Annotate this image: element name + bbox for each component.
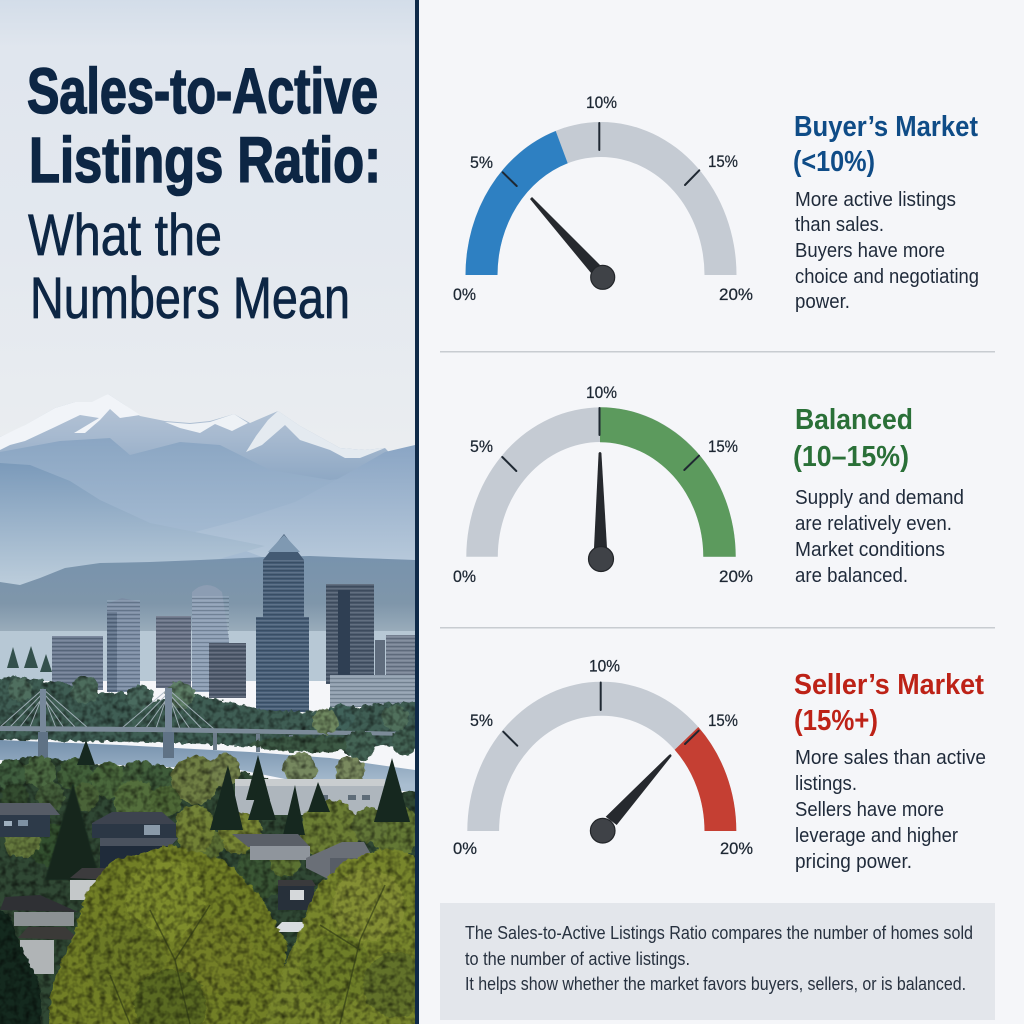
skyline towers <box>52 534 415 712</box>
gauge: balanced: 5% <box>470 437 493 456</box>
gauge: balanced: 10% <box>586 383 617 402</box>
cable-stayed bridge <box>0 688 415 758</box>
text: balanced: Supply and demand <box>795 487 964 509</box>
gauge: buyer's market: 15% <box>708 152 738 171</box>
callout: definition note: The Sales-to-Active Listings Ratio compares the number of homes sold <box>465 923 973 943</box>
gauge: seller's market: 5% <box>470 711 493 730</box>
text: buyer's market: (<10%) <box>793 146 875 178</box>
text: buyer's market: than sales. <box>795 214 884 236</box>
distant tree line <box>0 676 425 748</box>
mid olive trees <box>4 800 421 860</box>
conifers <box>45 740 410 880</box>
houses <box>0 803 372 974</box>
separator <box>440 627 995 628</box>
gauge: buyer's market: 0% <box>453 285 476 304</box>
gauge: seller's market <box>453 657 753 858</box>
left mountain <box>0 463 265 585</box>
foreground olive trees <box>48 845 427 1024</box>
text: buyer's market: power. <box>795 291 850 313</box>
text: seller's market: (15%+) <box>794 705 878 737</box>
separator <box>440 351 995 352</box>
title: What the <box>28 203 222 268</box>
text: seller's market: Sellers have more <box>795 799 944 821</box>
text: balanced: Balanced <box>795 404 913 436</box>
sky <box>0 0 415 480</box>
text: seller's market <box>794 669 986 873</box>
title: Numbers Mean <box>30 266 350 331</box>
text: seller's market: Seller’s Market <box>794 669 984 701</box>
text: buyer's market <box>793 111 979 313</box>
gauge: balanced: 20% <box>719 567 753 586</box>
title: Sales-to-Active <box>27 55 378 127</box>
text: balanced <box>793 404 964 587</box>
gauge: buyer's market <box>453 93 753 304</box>
text: buyer's market: choice and negotiating <box>795 266 979 288</box>
text: seller's market: More sales than active <box>795 747 986 769</box>
foreground dark tree <box>0 905 42 1024</box>
gauge: balanced: 0% <box>453 567 476 586</box>
tree branches <box>110 885 385 1024</box>
divider bar <box>415 0 419 1024</box>
text: balanced: (10–15%) <box>793 441 909 473</box>
title <box>27 55 381 331</box>
text: balanced: are balanced. <box>795 565 908 587</box>
gauge: balanced: 15% <box>708 437 738 456</box>
text: balanced: are relatively even. <box>795 513 952 535</box>
distant conifers <box>7 646 52 672</box>
callout: definition note: to the number of active listings. <box>465 949 690 969</box>
snow-capped mountain range <box>0 394 415 560</box>
text: seller's market: pricing power. <box>795 851 912 873</box>
gauge: buyer's market: 20% <box>719 285 753 304</box>
gauge: buyer's market: 10% <box>586 93 617 112</box>
right mountain <box>195 445 415 565</box>
text: seller's market: listings. <box>795 773 857 795</box>
title: Listings Ratio: <box>29 124 381 196</box>
callout: definition note: It helps show whether the market favors buyers, sellers, or is balanced. <box>465 974 966 994</box>
text: buyer's market: More active listings <box>795 189 956 211</box>
gauge: buyer's market: 5% <box>470 153 493 172</box>
mid-ground tree canopy <box>0 753 425 1024</box>
water <box>0 631 415 681</box>
river <box>0 740 415 792</box>
forested ridge <box>0 556 415 631</box>
text: balanced: Market conditions <box>795 539 945 561</box>
panel: city and mountains photo <box>0 0 427 1024</box>
apartment block <box>235 779 385 815</box>
gauge: seller's market: 0% <box>453 839 477 858</box>
gauge: seller's market: 15% <box>708 711 738 730</box>
callout: definition note <box>440 903 995 1020</box>
gauge: seller's market: 20% <box>720 839 753 858</box>
riverbank trees <box>250 709 418 760</box>
text: buyer's market: Buyers have more <box>795 240 945 262</box>
gauge: seller's market: 10% <box>589 657 620 676</box>
gauge: balanced <box>453 383 753 586</box>
text: buyer's market: Buyer’s Market <box>794 111 978 143</box>
text: seller's market: leverage and higher <box>795 825 958 847</box>
